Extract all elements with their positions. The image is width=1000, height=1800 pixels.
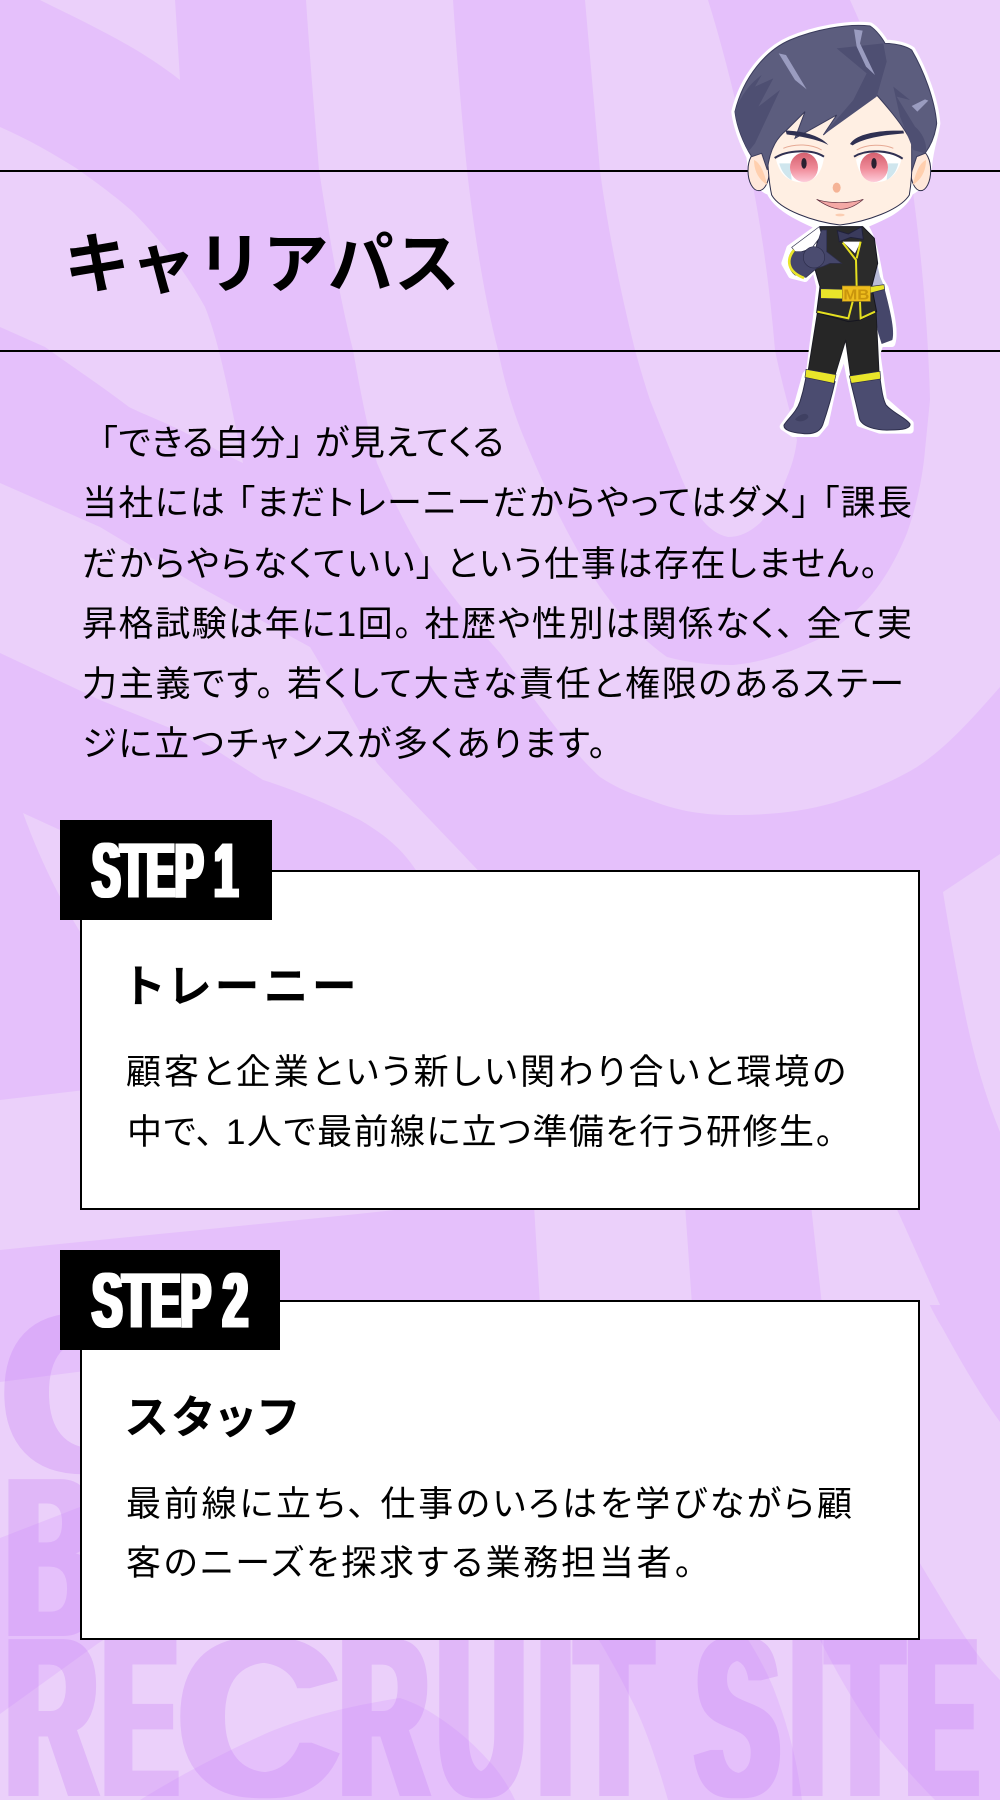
step 1 description: 顧客と企業という新しい関わり合いと環境の bbox=[126, 1053, 846, 1092]
intro text block: 「できる自分」 が見えてくる bbox=[100, 424, 504, 463]
header rule lines bbox=[0, 171, 1000, 351]
back hand arm bbox=[867, 238, 884, 288]
belt bbox=[821, 285, 885, 304]
vest bbox=[813, 227, 878, 322]
step 1 tag label: STEP 1 bbox=[92, 828, 238, 914]
bow tie bbox=[837, 227, 863, 242]
step 1 description: 中で、 1人で最前線に立つ準備を行う研修生。 bbox=[127, 1113, 833, 1152]
watermark: CAREER / RECRUIT SITE letters: C bbox=[1, 1267, 164, 1521]
character mascot bbox=[735, 25, 937, 434]
shirt and tie collar bbox=[843, 242, 861, 253]
step 2 tag bbox=[60, 1250, 280, 1350]
eyebrows bbox=[786, 131, 904, 145]
hair bbox=[735, 25, 937, 172]
watermark: CAREER / RECRUIT SITE letters: B bbox=[6, 1431, 97, 1685]
title: キャリアパス bbox=[64, 227, 460, 301]
step 1 description bbox=[126, 1053, 846, 1152]
step 2 description: 客のニーズを探求する業務担当者。 bbox=[126, 1544, 692, 1583]
boots bbox=[784, 377, 835, 434]
step 2 tag label: STEP 2 bbox=[92, 1258, 248, 1344]
step 1 card bbox=[81, 871, 919, 1209]
hair shine and shade bbox=[735, 43, 926, 153]
intro text block: 力主義です。 若くして大きな責任と権限のあるステー bbox=[82, 665, 904, 704]
step 2 description bbox=[126, 1485, 852, 1583]
panel: step 2 bbox=[60, 1250, 919, 1639]
step 1 tag bbox=[60, 820, 272, 920]
intro text block: だからやらなくていい」 という仕事は存在しません。 bbox=[82, 545, 878, 584]
character white outline bbox=[735, 25, 937, 433]
eyes bbox=[775, 145, 903, 182]
step 2 card bbox=[81, 1301, 919, 1639]
buckle letters: MB bbox=[843, 288, 869, 304]
ears bbox=[748, 151, 769, 191]
nose bbox=[833, 183, 841, 193]
step 1 heading: トレーニー bbox=[126, 961, 356, 1012]
panel: step 1 bbox=[60, 820, 919, 1209]
intro text block: 当社には 「まだトレーニーだからやってはダメ」 「課長 bbox=[82, 484, 912, 523]
intro text block bbox=[82, 424, 912, 764]
watermark: CAREER / RECRUIT SITE letters bbox=[1, 1267, 977, 1800]
intro text block: ジに立つチャンスが多くあります。 bbox=[82, 725, 606, 764]
mouth bbox=[817, 199, 863, 209]
pointing arm bbox=[792, 227, 822, 253]
step 2 description: 最前線に立ち、 仕事のいろはを学びながら顧 bbox=[126, 1485, 852, 1524]
face bbox=[767, 93, 912, 225]
intro text block: 昇格試験は年に1回。 社歴や性別は関係なく、 全て実 bbox=[82, 605, 912, 644]
step 2 heading: スタッフ bbox=[126, 1392, 298, 1443]
trousers bbox=[808, 310, 879, 376]
